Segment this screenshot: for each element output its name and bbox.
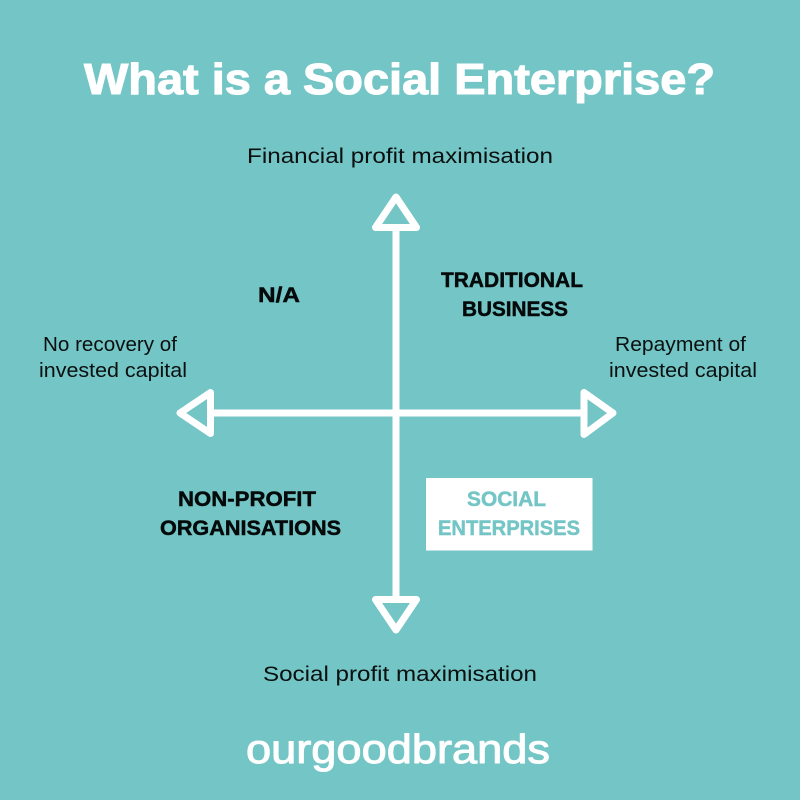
logo: ourgoodbrands: ourgoodbrands (246, 726, 550, 772)
axis label: top: Financial profit maximisation (247, 145, 553, 168)
arrow: right (584, 392, 613, 434)
vertical axis line (392, 228, 400, 599)
title: What is a Social Enterprise? (84, 55, 715, 104)
axis label: left: No recovery of (43, 334, 177, 356)
arrow: down (376, 600, 416, 630)
axis label: right (609, 334, 757, 382)
axis label: right: Repayment of (615, 334, 746, 356)
axis label: bottom: Social profit maximisation (263, 663, 537, 686)
quadrant label: non-profit organisations: NON-PROFIT (178, 488, 316, 511)
arrow: left (180, 392, 210, 434)
axis label: left (39, 334, 187, 382)
axis label: left: invested capital (39, 360, 187, 382)
horizontal axis line (211, 410, 584, 416)
axis label: right: invested capital (609, 360, 757, 382)
quadrant label: non-profit organisations: ORGANISATIONS (160, 517, 341, 540)
quadrant label: traditional business (441, 269, 583, 321)
quadrant label: non-profit organisations (160, 488, 341, 540)
quadrant label: traditional business: TRADITIONAL (441, 269, 583, 292)
highlighted box: social enterprises (426, 478, 592, 550)
highlighted box: social enterprises: ENTERPRISES (438, 517, 580, 540)
quadrant axes with arrows (180, 197, 613, 630)
arrow: up (376, 197, 416, 228)
highlighted box: social enterprises: SOCIAL (467, 488, 546, 511)
quadrant label: N/A: N/A (258, 284, 300, 307)
quadrant label: traditional business: BUSINESS (462, 298, 568, 321)
